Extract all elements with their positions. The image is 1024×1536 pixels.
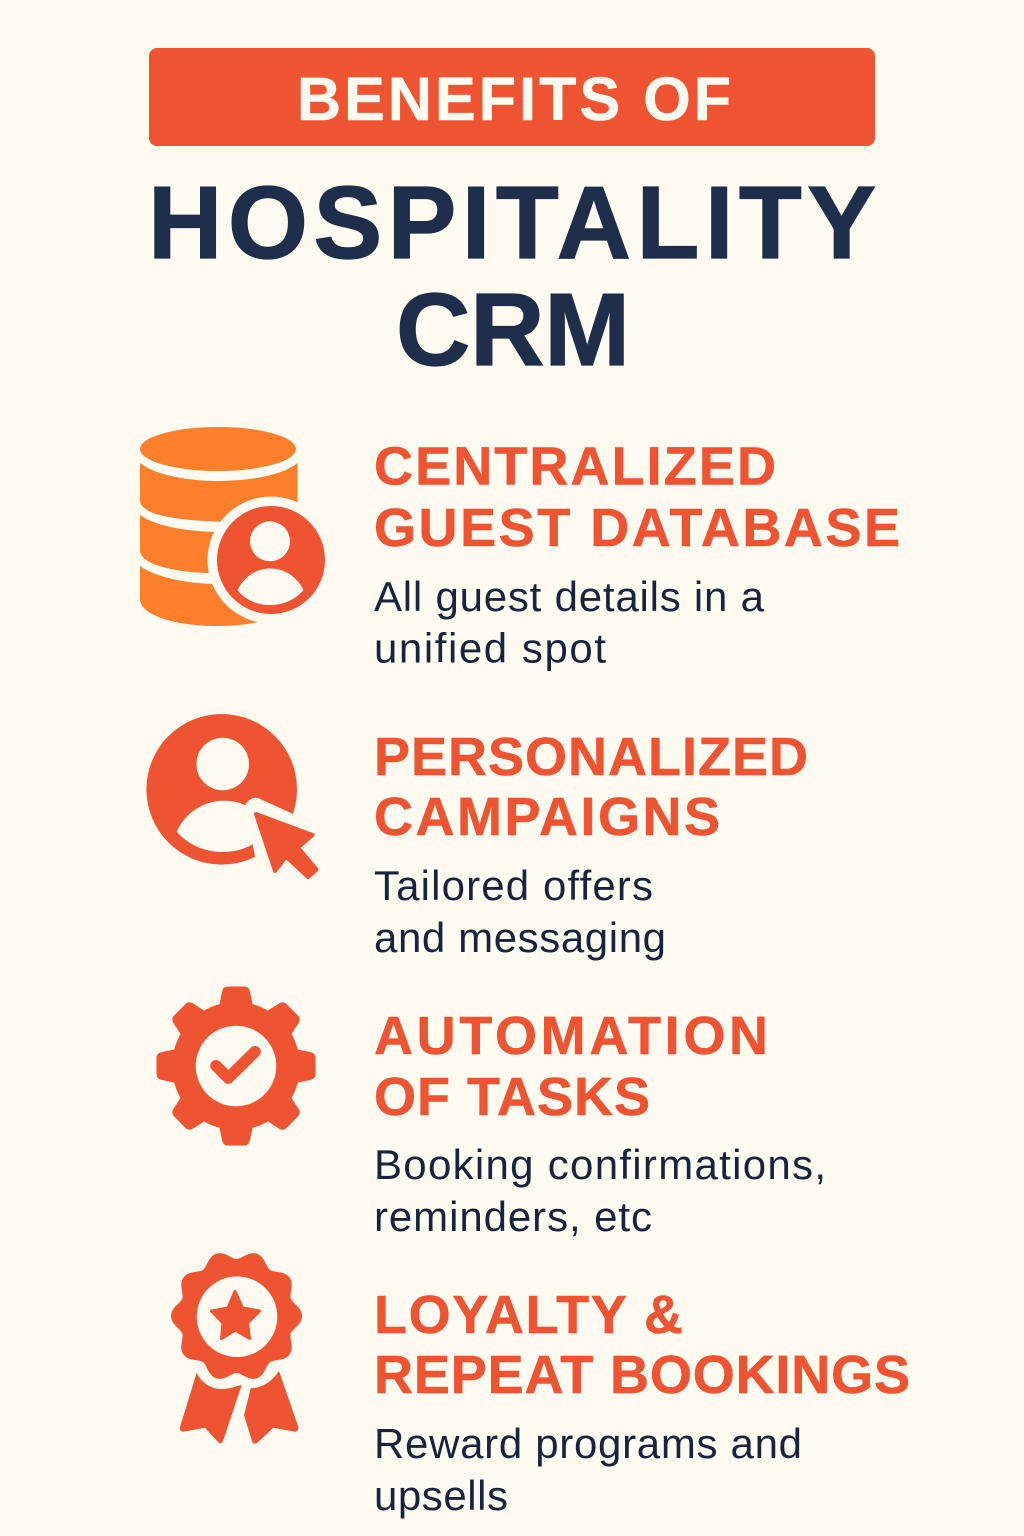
text: guest details — [374, 573, 765, 672]
text: booking confirmations — [374, 1141, 826, 1240]
text: booking confirmations: Booking confirmations, — [374, 1141, 826, 1188]
title banner: BENEFITS OF — [297, 65, 731, 133]
icon: gear with check — [156, 986, 316, 1146]
heading: centralized guest database — [374, 436, 900, 558]
heading: loyalty and repeat bookings — [374, 1285, 910, 1405]
text: reward programs: upsells — [374, 1472, 508, 1519]
text: tailored offers: Tailored offers — [374, 862, 653, 909]
heading: centralized guest database: GUEST DATABASE — [374, 498, 900, 558]
panel: personalized campaigns — [146, 714, 808, 961]
title: hospitality crm: CRM — [396, 272, 630, 387]
panel: centralized guest database — [140, 427, 900, 672]
heading: loyalty and repeat bookings: REPEAT BOOKINGS — [374, 1345, 910, 1405]
panel: loyalty and repeat bookings — [171, 1248, 910, 1519]
heading: personalized campaigns: CAMPAIGNS — [374, 787, 720, 847]
panel: automation of tasks — [156, 986, 826, 1240]
heading: personalized campaigns — [374, 727, 808, 847]
title: hospitality crm — [148, 165, 876, 387]
icon: person with cursor — [146, 714, 316, 877]
heading: loyalty and repeat bookings: LOYALTY & — [374, 1285, 683, 1345]
heading: centralized guest database: CENTRALIZED — [374, 436, 776, 496]
icon: database with guest — [140, 427, 334, 626]
text: tailored offers: and messaging — [374, 914, 666, 961]
text: reward programs — [374, 1420, 802, 1519]
text: guest details: unified spot — [374, 624, 606, 672]
heading: automation of tasks — [374, 1006, 768, 1127]
title banner — [149, 48, 875, 146]
heading: automation of tasks: OF TASKS — [374, 1067, 650, 1127]
heading: personalized campaigns: PERSONALIZED — [374, 727, 808, 787]
text: tailored offers — [374, 862, 666, 961]
text: reward programs: Reward programs and — [374, 1420, 802, 1467]
heading: automation of tasks: AUTOMATION — [374, 1006, 768, 1066]
text: booking confirmations: reminders, etc — [374, 1193, 652, 1240]
icon: award rosette — [171, 1248, 302, 1444]
title: hospitality crm: HOSPITALITY — [148, 165, 876, 280]
text: guest details: All guest details in a — [374, 573, 765, 620]
